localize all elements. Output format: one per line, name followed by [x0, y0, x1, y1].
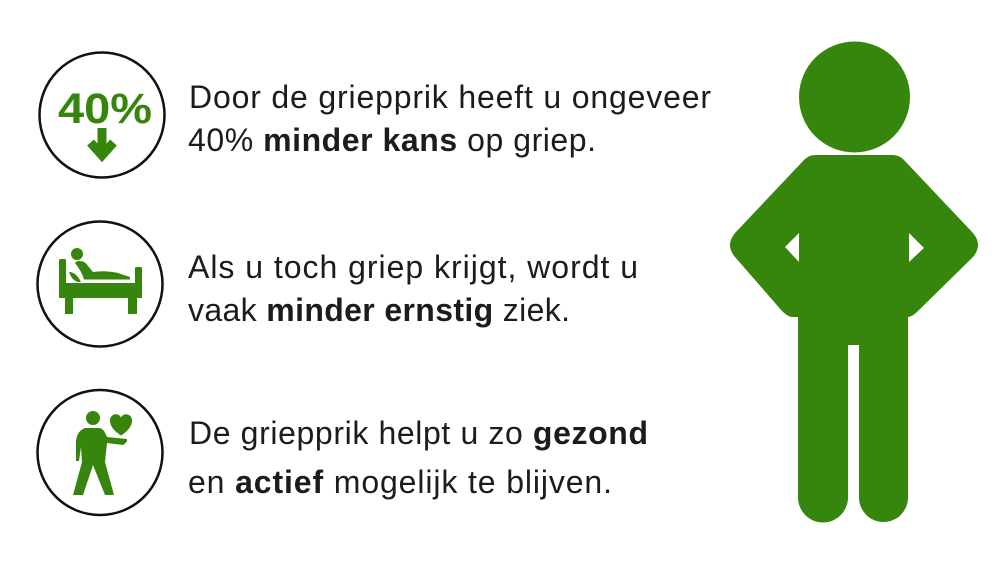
icon: 40 percent lower: 40% — [58, 85, 152, 133]
large green figure — [730, 42, 978, 522]
icon: person in bed — [38, 222, 162, 346]
text: minder kans: 40% minder kans op griep. — [188, 122, 596, 158]
text: minder kans: Door de griepprik heeft u ongeveer — [189, 79, 711, 115]
icon: 40 percent lower — [40, 52, 164, 178]
text: gezond en actief — [188, 415, 648, 500]
text: gezond en actief: en actief mogelijk te blijven. — [188, 464, 612, 500]
icon: person with heart — [38, 390, 162, 515]
text: minder ernstig: Als u toch griep krijgt, wordt u — [188, 249, 638, 285]
text: gezond en actief: De griepprik helpt u zo gezond — [189, 415, 648, 451]
text: minder ernstig — [188, 249, 638, 328]
text: minder ernstig: vaak minder ernstig ziek. — [188, 292, 570, 328]
text: minder kans — [188, 79, 711, 158]
